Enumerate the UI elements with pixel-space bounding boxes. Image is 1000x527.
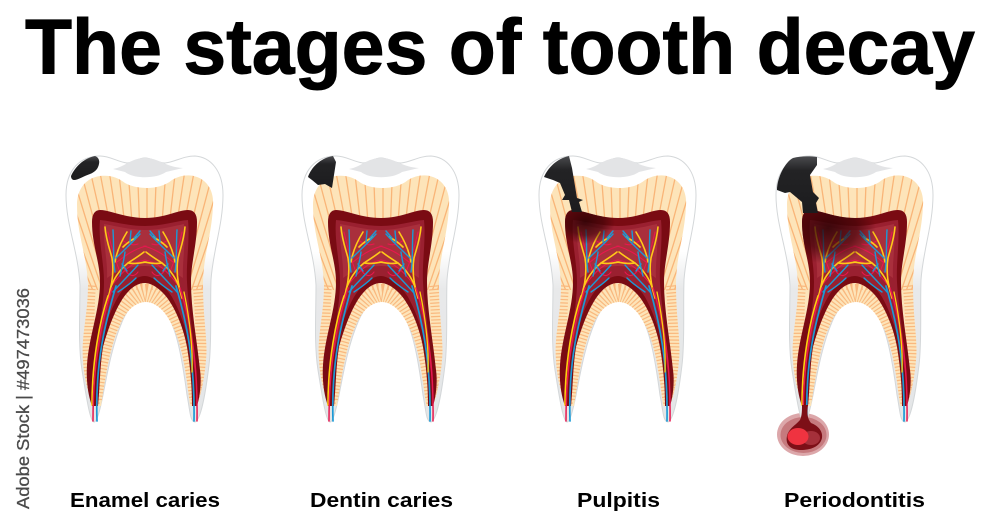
pulp inflammation shading bbox=[565, 210, 612, 244]
watermark: stock id: Adobe Stock | #497473036 bbox=[13, 288, 33, 509]
panel: pulpitis tooth bbox=[538, 156, 696, 422]
label: pulpitis: Pulpitis bbox=[577, 489, 660, 512]
abscess core bbox=[787, 405, 822, 450]
title: The stages of tooth decay bbox=[25, 2, 975, 90]
icon: dentin cavity bbox=[308, 156, 336, 188]
label: periodontitis: Periodontitis bbox=[784, 489, 925, 512]
abscess at root tip bbox=[777, 413, 829, 456]
icon: periodontitis cavity bbox=[777, 156, 819, 213]
label: enamel caries: Enamel caries bbox=[70, 489, 220, 512]
label: dentin caries: Dentin caries bbox=[310, 489, 453, 512]
icon: enamel cavity bbox=[71, 156, 99, 180]
pulp inflammation shading bbox=[802, 211, 874, 263]
panel: periodontitis tooth bbox=[776, 156, 934, 456]
panel: dentin caries tooth bbox=[269, 156, 497, 422]
panel: enamel caries tooth bbox=[33, 156, 261, 422]
icon: pulpitis cavity bbox=[544, 156, 583, 212]
